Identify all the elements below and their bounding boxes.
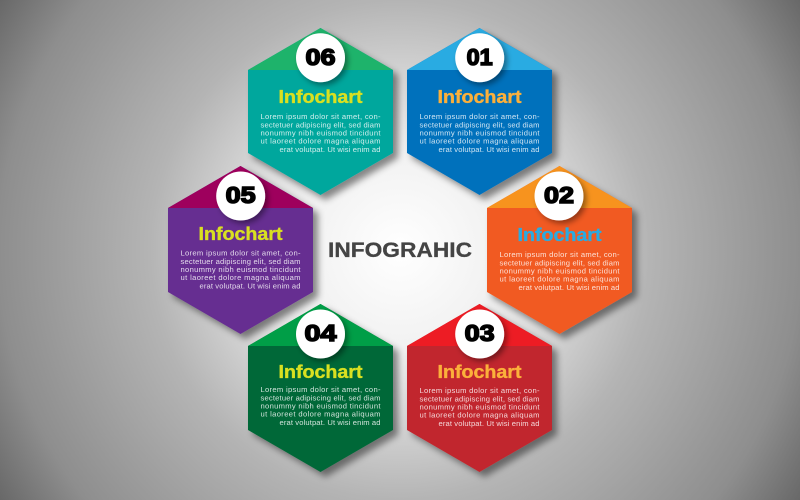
panel: 03: sectetuer adipiscing elit, sed diam: [420, 394, 540, 403]
panel: 02: nonummy nibh euismod tincidunt: [500, 266, 620, 276]
panel: 06: ut laoreet dolore magna aliquam: [260, 137, 380, 146]
panel: 01: ut laoreet dolore magna aliquam: [420, 137, 540, 146]
panel: 03: 03: [465, 320, 495, 346]
panel: 04: erat volutpat. Ut wisi enim ad: [280, 418, 380, 427]
panel: 01: sectetuer adipiscing elit, sed diam: [420, 120, 540, 129]
panel: 05: Infochart: [198, 224, 282, 244]
panel: 05: 05: [226, 182, 256, 208]
panel: 05: ut laoreet dolore magna aliquam: [180, 273, 300, 282]
panel: 02: 02: [544, 182, 574, 208]
panel: 03: ut laoreet dolore magna aliquam: [420, 411, 540, 420]
panel: 02: ut laoreet dolore magna aliquam: [500, 275, 620, 284]
panel: 03: erat volutpat. Ut wisi enim ad: [438, 419, 540, 428]
panel: 04: ut laoreet dolore magna aliquam: [260, 410, 380, 419]
center title: INFOGRAHIC: [328, 238, 472, 262]
panel: 01: [407, 28, 552, 195]
panel: 03: Lorem ipsum dolor sit amet, con-: [420, 386, 540, 395]
panel: 04: Infochart: [278, 362, 362, 382]
panel: 01: Lorem ipsum dolor sit amet, con-: [420, 112, 540, 121]
panel: 02: erat volutpat. Ut wisi enim ad: [518, 283, 620, 292]
panel: 01: Infochart: [438, 87, 522, 107]
panel: 05: erat volutpat. Ut wisi enim ad: [200, 282, 300, 290]
panel: 05: sectetuer adipiscing elit, sed diam: [180, 257, 300, 266]
panel: 02: [487, 166, 632, 334]
panel: 04: Lorem ipsum dolor sit amet, con-: [260, 385, 381, 394]
panel: 06: 06: [306, 44, 336, 70]
panel: 01: erat volutpat. Ut wisi enim ad: [438, 145, 540, 154]
panel: 04: [248, 304, 393, 472]
panel: 06: erat volutpat. Ut wisi enim ad: [280, 145, 380, 154]
panel: 06: Lorem ipsum dolor sit amet, con-: [260, 112, 381, 121]
panel: 02: sectetuer adipiscing elit, sed diam: [500, 258, 620, 267]
panel: 04: 04: [304, 320, 337, 346]
panel: 04: nonummy nibh euismod tincidunt: [260, 402, 381, 410]
panel: 04: sectetuer adipiscing elit, sed diam: [260, 393, 380, 402]
panel: 06: nonummy nibh euismod tincidunt: [260, 128, 381, 138]
panel: 01: 01: [467, 44, 493, 70]
panel: 05: [168, 166, 313, 334]
panel: 06: [248, 28, 393, 195]
panel: 03: nonummy nibh euismod tincidunt: [420, 402, 540, 412]
panel: 03: Infochart: [438, 362, 522, 382]
panel: 03: [407, 304, 552, 472]
panel: 05: Lorem ipsum dolor sit amet, con-: [180, 248, 301, 258]
panel: 02: Lorem ipsum dolor sit amet, con-: [500, 250, 620, 259]
panel: 02: Infochart: [518, 225, 602, 245]
panel: 06: Infochart: [278, 87, 362, 107]
panel: 01: nonummy nibh euismod tincidunt: [420, 128, 540, 138]
panel: 05: nonummy nibh euismod tincidunt: [180, 265, 301, 274]
panel: 06: sectetuer adipiscing elit, sed diam: [260, 120, 380, 129]
